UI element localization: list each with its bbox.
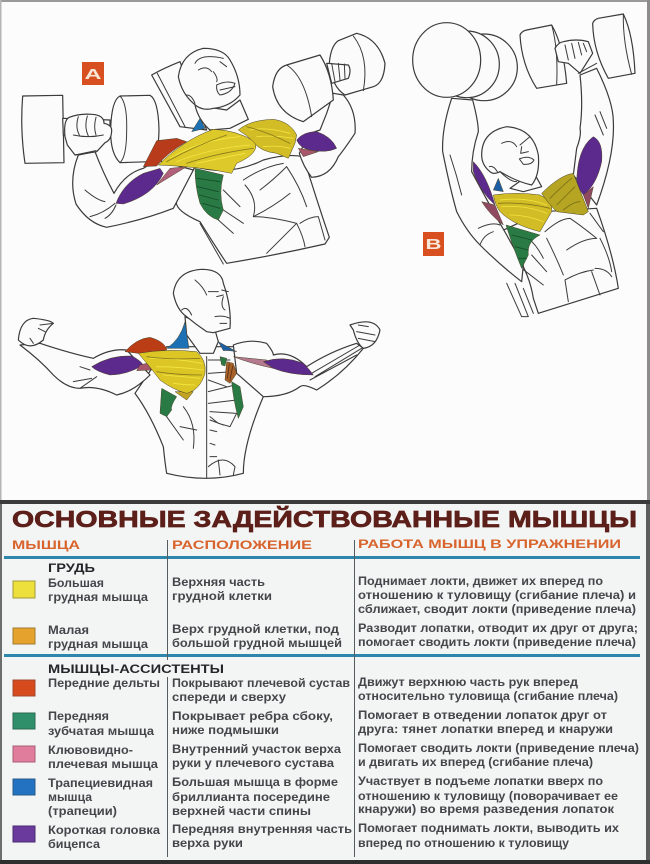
row: coracobrachialis: руки у плечевого сустава [172,757,335,770]
row: pectoralis major [13,575,636,616]
row: trapezius: Большая мышца в форме [172,776,339,789]
badge A [82,62,104,85]
table panel [0,500,650,864]
row: trapezius: мышца [48,791,93,804]
far dumbbell [520,14,635,88]
column headers: МЫШЦА [12,538,80,552]
figure C: front view arms spread, anatomy [18,269,380,478]
abdominal lines B [522,218,612,302]
right arm C [233,341,363,397]
row: serratus anterior: друга: тянет лопатки вперед и кнаружи [358,723,613,736]
section heading: chest: ГРУДЬ [48,561,95,575]
row: serratus anterior: Передняя [48,710,109,723]
head A [178,48,248,130]
figure A: incline dumbbell press, arms low [22,33,385,264]
column headers: РАСПОЛОЖЕНИЕ [172,538,312,552]
muscle: coracobrachialis left C [137,363,152,371]
rib cage C [167,357,237,478]
row: pectoralis major: Большая [48,577,104,590]
row: serratus anterior [13,709,613,738]
row: pectoralis minor: большой грудной мышцей [172,637,342,650]
left arm B [443,98,523,282]
left arm C [20,343,150,395]
row: biceps short head: вперед по отношению к туловищу [358,837,570,850]
left fist [65,114,112,155]
row: biceps short head [13,822,620,851]
row: front deltoids: Передние дельты [48,677,160,690]
figure B: dumbbells pressed up [413,14,635,317]
forearm tendons C [310,345,362,380]
muscle: pectoralis minor C [225,362,237,383]
right arm B [573,68,613,205]
muscle: serratus left C [160,388,177,417]
row: biceps short head: Передняя внутренняя часть [172,823,352,836]
row: pectoralis minor: Разводит лопатки, отводит их друг от друга; [358,622,638,635]
left arm creases C [73,367,97,388]
row: trapezius: верхней части спины [172,805,311,818]
row: pectoralis minor: Малая [48,624,89,637]
bench A [152,62,229,264]
muscle: pectoralis major A [158,119,297,173]
muscle: serratus B [506,225,540,268]
row: serratus anterior: ниже подмышки [172,724,279,737]
muscle: biceps right C [263,359,313,375]
muscle: front deltoid A [143,138,187,167]
muscle: coracobrachialis B [482,187,593,225]
row: biceps short head: верха руки [172,837,243,850]
row: front deltoids [13,676,618,704]
torso A [176,156,329,263]
row: serratus anterior: Покрывает ребра сбоку, [172,710,333,723]
left arm creases A [85,190,116,218]
row: trapezius: кнаружи) во время разведения лопаток [358,803,614,816]
muscle: pectoralis major B [493,173,588,232]
big dumbbell [413,23,517,101]
row: trapezius: отношению к туловищу (поворачивает ее [358,790,619,803]
row: pectoralis major: сближает, сводит локти (приведение плеча) [358,603,636,616]
table rules [4,540,640,857]
muscle: trapezius C [167,322,237,352]
swatch orange [13,628,35,644]
right dumbbell [273,33,385,122]
muscle: biceps left B [473,162,495,205]
row: pectoralis minor: грудная мышца [48,638,149,651]
muscle: front deltoid C [125,337,167,353]
row: pectoralis major: Поднимает локти, движет их вперед по [358,575,603,588]
row: front deltoids: Движут верхнюю часть рук вперед [358,676,579,689]
muscle: biceps left C [92,356,143,375]
muscle: pectoralis major C [138,350,205,400]
muscle: serratus A [195,168,223,220]
column headers [12,537,621,552]
row: front deltoids: Покрывают плечевой сустав [172,677,350,690]
torso B [500,208,618,313]
row: pectoralis major: грудной клетки [172,590,272,603]
section heading: assistants: МЫШЦЫ-АССИСТЕНТЫ [48,662,224,676]
row: serratus anterior: Помогает в отведении лопаток друг от [358,709,607,722]
row: trapezius: Участвует в подъеме лопатки вверх по [358,775,603,788]
bench B [507,283,533,317]
row: front deltoids: спереди и сверху [172,691,287,704]
muscle: trapezius B [493,178,503,192]
table title: ОСНОВНЫЕ ЗАДЕЙСТВОВАННЫЕ МЫШЦЫ [12,505,637,532]
row: pectoralis minor [13,622,638,651]
muscle: trapezius A [192,118,205,132]
muscle: pink strip right C [233,357,273,368]
row: biceps short head: бицепса [48,838,101,851]
muscle: biceps right A [297,132,337,157]
row: coracobrachialis [13,742,639,771]
right fist C [350,322,380,348]
row: biceps short head: Короткая головка [48,824,161,837]
row: pectoralis minor: помогает сводить локти (приведение плеча) [358,636,636,649]
head B [482,127,542,192]
badge B [423,232,444,256]
row: trapezius: (трапеции) [48,805,117,818]
row: pectoralis major: Верхняя часть [172,576,265,589]
muscle: coracobrachialis A [157,167,187,185]
badge B: B [426,236,442,253]
head C [173,269,230,333]
neck C [185,317,218,353]
row: serratus anterior: зубчатая мышца [48,725,155,738]
muscle: serratus right C [220,357,243,418]
left dumbbell [22,95,159,163]
fist B [555,40,597,73]
muscle: biceps left A [116,168,163,204]
row: coracobrachialis: Клювовидно- [48,744,133,757]
row: pectoralis minor: Верх грудной клетки, под [172,623,340,636]
badge A: A [84,66,102,83]
swatch blue [13,779,35,795]
swatch green [13,713,35,729]
row: coracobrachialis: плечевая мышца [48,758,159,771]
abdominal lines A [218,163,325,253]
row: front deltoids: относительно туловища (сгибание плеча) [358,690,618,703]
muscle: biceps right B [577,137,602,195]
row: pectoralis major: отношению к туловищу (сгибание плеча) и [358,589,636,602]
left arm creases B [450,155,500,245]
row: trapezius [13,775,619,818]
row: biceps short head: Помогает поднимать локти, выводить их [358,822,620,835]
torso C [135,347,263,478]
row: coracobrachialis: и двигать их вперед (сгибание плеча) [358,756,593,769]
row: trapezius: бриллианта посередине [172,791,331,804]
swatch red [13,680,35,696]
left fist C [18,318,53,346]
left arm A [73,152,193,227]
right arm A [299,93,355,177]
right arm creases B [590,112,607,232]
row: coracobrachialis: Внутренний участок верха [172,743,342,756]
row: pectoralis major: грудная мышца [48,591,149,604]
swatch pink [13,746,35,762]
swatch purple [13,826,35,842]
row: trapezius: Трапециевидная [48,777,153,790]
swatch yellow [13,581,35,598]
column headers: РАБОТА МЫШЦ В УПРАЖНЕНИИ [358,537,621,551]
row: coracobrachialis: Помогает сводить локти (приведение плеча) [358,742,639,755]
